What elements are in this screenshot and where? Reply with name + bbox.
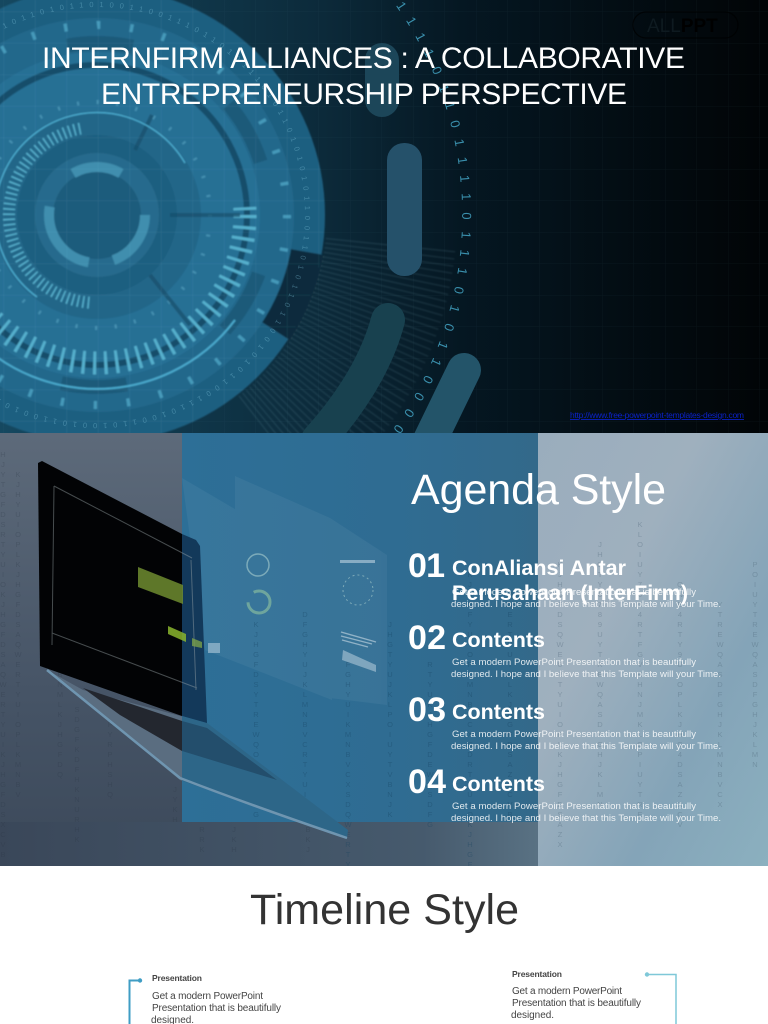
background [0, 433, 768, 866]
item 01: Get a modern PowerPoint Presentation that is beautifully [452, 587, 696, 598]
laptop screen [38, 461, 182, 716]
screen green wave [168, 626, 186, 642]
matrix code columns: BKJ [304, 825, 312, 855]
matrix code columns on right panel: KLOIUY7654RTFGVBHNJMKLOPIUYTRE [636, 520, 644, 820]
green wave in panel [192, 638, 202, 648]
matrix code columns: JKH [230, 825, 238, 855]
timeline heading: Timeline Style [250, 886, 519, 934]
matrix code columns: JYKH [170, 785, 180, 825]
matrix code columns: RRK [198, 825, 206, 855]
item 02: Contents [452, 628, 545, 652]
matrix code columns on right panel: JHGTY6789UYTREWQASDFGHJKLMN [595, 540, 604, 810]
matrix code columns over blue: KJHGFDSYTREWQOPLKJHG [251, 620, 260, 820]
left bracket connector [130, 978, 142, 1024]
right timeline card [511, 969, 641, 1021]
screen green data [138, 567, 183, 604]
matrix code columns on right panel: POIUYTREWQASDFGHJKLMN [750, 560, 760, 770]
matrix code columns: SDGFKDFHKNURHK [72, 705, 82, 845]
matrix code columns on right panel [555, 520, 760, 850]
item 01: 01 [408, 547, 445, 585]
left timeline card: Presentation [152, 973, 202, 983]
laptop base inside panel [182, 716, 348, 837]
circular tech dial graphic [0, 0, 420, 510]
icon: rounded capsules [318, 43, 464, 440]
matrix code columns over blue [251, 570, 514, 890]
background [0, 0, 768, 433]
logo pill [633, 12, 738, 38]
logo pill: ALLPPT [647, 16, 718, 37]
link: http://www.free-powerpoint-templates-design.com [570, 410, 744, 420]
item 02: designed. I hope and I believe that this Template will your Time. [451, 669, 721, 680]
item 04: designed. I hope and I believe that this Template will your Time. [451, 813, 721, 824]
item 02: 02 [408, 619, 446, 657]
matrix code columns on right panel: YTREWQASDFGHJKLMNBVCX [715, 600, 724, 810]
item 03: Contents [452, 700, 545, 724]
item 04: Get a modern PowerPoint Presentation that is beautifully [452, 801, 696, 812]
hologram gauges [247, 554, 376, 672]
slide 2: agenda slide [0, 433, 768, 866]
base edge [47, 670, 347, 838]
right timeline card: Get a modern PowerPoint [512, 986, 622, 997]
matrix code columns: XCVBNMLKJHGFDQ [56, 640, 64, 780]
item 02: Get a modern PowerPoint Presentation that is beautifully [452, 657, 696, 668]
laptop base left of panel [54, 674, 182, 781]
matrix code columns [0, 450, 312, 860]
right timeline card: designed. [511, 1010, 554, 1021]
screen chart lines [52, 486, 197, 690]
title [42, 42, 685, 111]
agenda heading: Agenda Style [411, 466, 666, 514]
title: ENTREPRENEURSHIP PERSPECTIVE [101, 78, 627, 111]
matrix code columns on right panel: QWE4RTY9UIOPLKJHG4DSAZXCV [675, 580, 684, 830]
item 04: Contents [452, 772, 545, 796]
right timeline card: Presentation [512, 969, 562, 979]
item 01: Perusahaan (InterFirm) [452, 581, 688, 605]
laptop illustration [38, 461, 348, 838]
right timeline card: Presentation that is beautifully [512, 998, 641, 1009]
slide 1: title slide [0, 0, 768, 433]
item 04: 04 [408, 763, 446, 801]
keyboard in panel [182, 721, 277, 780]
keyboard [83, 688, 182, 751]
hologram wave [208, 643, 220, 653]
left timeline card: Get a modern PowerPoint [152, 991, 263, 1002]
item 01: ConAliansi Antar [452, 556, 627, 580]
title: INTERNFIRM ALLIANCES : A COLLABORATIVE [42, 42, 685, 75]
item 03 [408, 691, 721, 752]
item 04 [408, 763, 721, 824]
matrix code columns: KJHYUIOPLKJHGFDSAQWERTYUIOPLKMNBV [13, 470, 22, 800]
right bracket connector [645, 972, 676, 1024]
matrix code columns on right panel: KJHGFDSQWE8RTYUIOPLKJHGFDSAZX [555, 560, 564, 850]
left timeline card [151, 973, 281, 1024]
item 03: 03 [408, 691, 446, 729]
item 03: Get a modern PowerPoint Presentation that is beautifully [452, 729, 696, 740]
matrix code columns over blue: RTYUKJHGFDEWQSDFG [425, 660, 434, 830]
item 01 [408, 547, 721, 610]
matrix code columns over blue: DFGHYUJKLMNBVCRTYUIOK [300, 610, 310, 820]
floating translucent screens [182, 476, 387, 705]
matrix code columns over blue: JHGTYUJKLPOIUYTVBNJK [386, 620, 394, 820]
slide 3: timeline slide [128, 886, 677, 1024]
blue overlay panel [182, 433, 538, 822]
item 01: designed. I hope and I believe that this Template will your Time. [451, 599, 721, 610]
left timeline card: Presentation that is beautifully [152, 1003, 281, 1014]
item 03: designed. I hope and I believe that this Template will your Time. [451, 741, 721, 752]
background [0, 866, 768, 1024]
matrix code columns over blue: QWERTYUIOLKJHGFDSAZXCVB [505, 590, 514, 820]
matrix code columns: YTFYRPHSHQ [106, 700, 114, 800]
screen in panel [182, 534, 207, 723]
item 02 [408, 619, 721, 680]
